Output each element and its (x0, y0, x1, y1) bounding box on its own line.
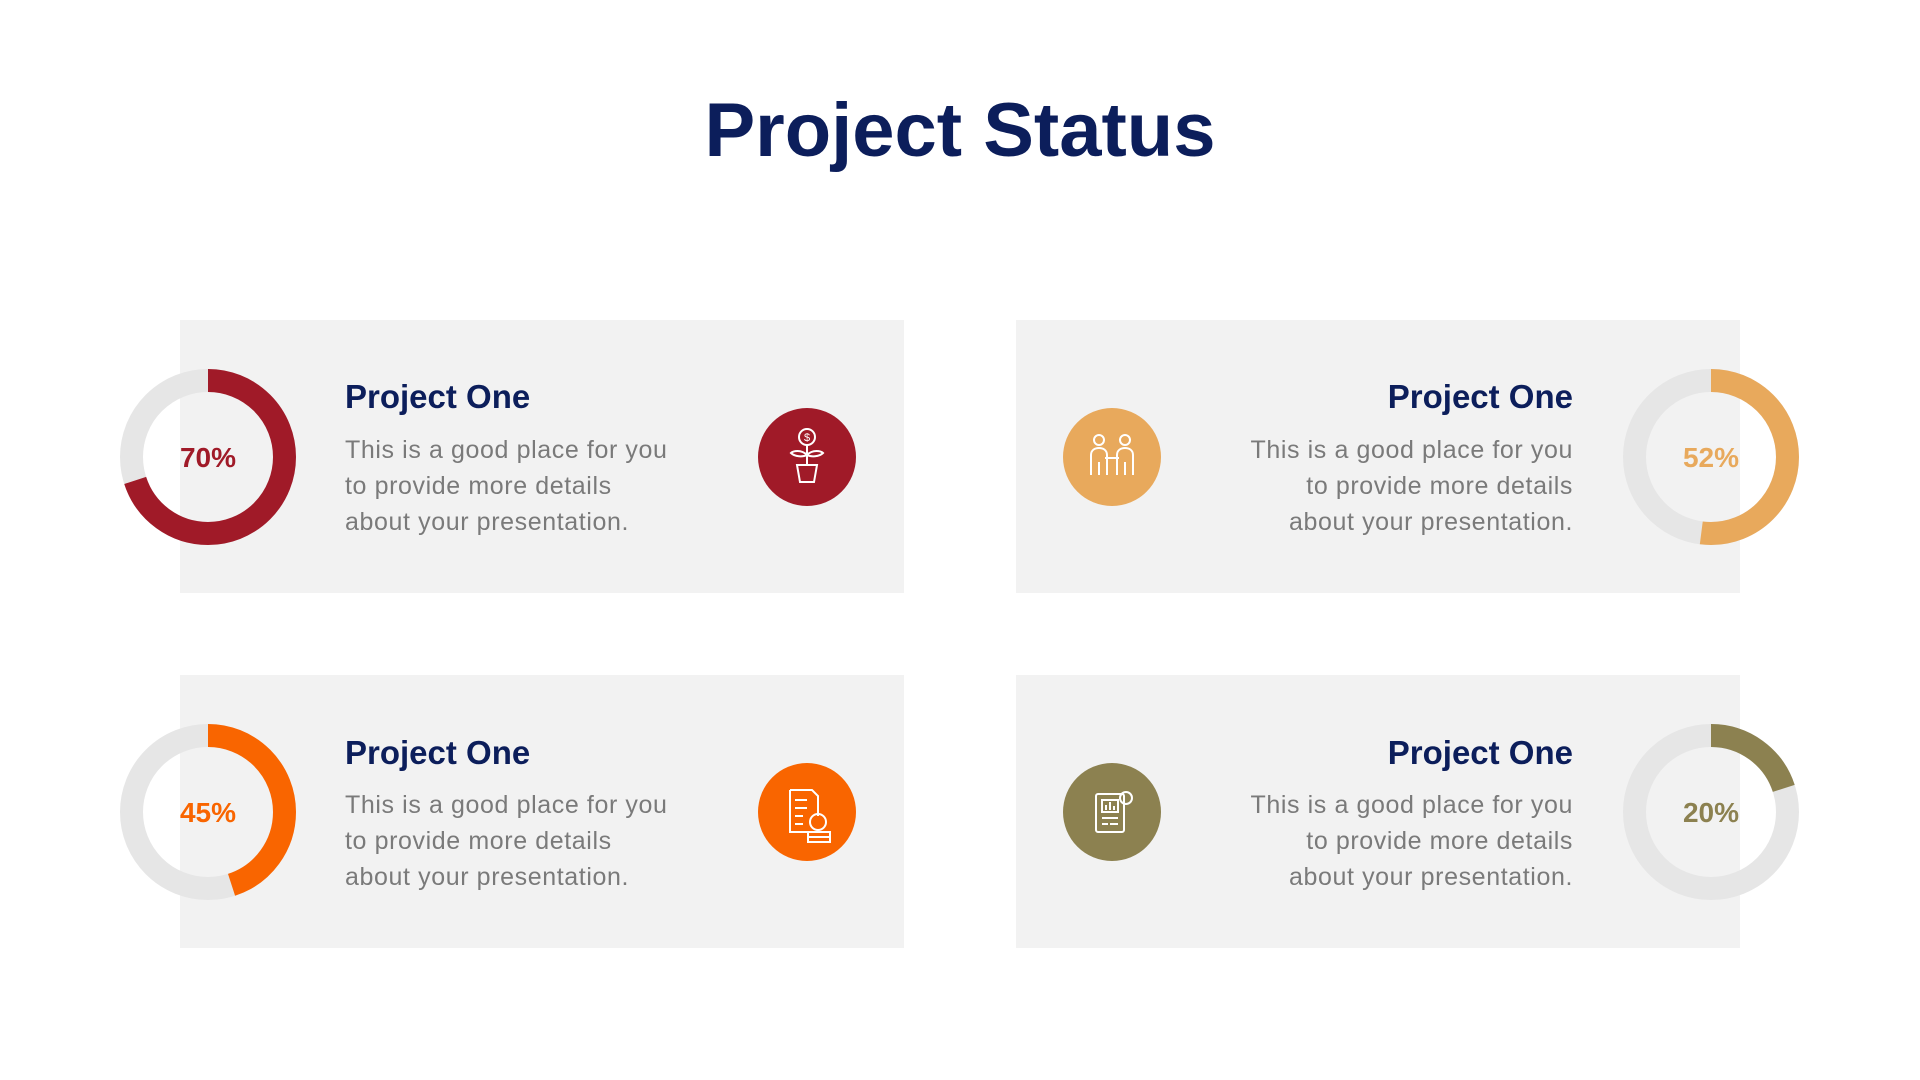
heading: top-right: Project One (1388, 378, 1573, 415)
donut: 70% (132, 380, 284, 534)
panel: top-left (180, 320, 904, 593)
panel: bottom-left (180, 675, 904, 948)
heading: bottom-right: Project One (1388, 734, 1573, 771)
text: bottom-right: to provide more details (1306, 827, 1573, 855)
text: bottom-left: This is a good place for you (345, 791, 668, 819)
panel: top-right (1016, 320, 1740, 593)
text: top-left: to provide more details (345, 472, 612, 500)
text: bottom-left: about your presentation. (345, 863, 629, 891)
donut: 45%: 45% (180, 797, 236, 828)
heading: top-left: Project One (345, 378, 530, 415)
panel: bottom-right (1016, 675, 1740, 948)
text: top-left: about your presentation. (345, 508, 629, 536)
donut: 20%: 20% (1683, 797, 1739, 828)
text: bottom-right: This is a good place for you (1250, 791, 1573, 819)
text: top-left: This is a good place for you (345, 436, 668, 464)
text: bottom-right (1250, 791, 1573, 891)
title: Project Status (704, 88, 1216, 173)
donut: 20% (1634, 736, 1788, 888)
donut: 52%: 52% (1683, 442, 1739, 473)
text: bottom-right: about your presentation. (1289, 863, 1573, 891)
text: top-left (345, 436, 668, 536)
text: bottom-left: to provide more details (345, 827, 612, 855)
text: bottom-left (345, 791, 668, 891)
donut: 52% (1634, 380, 1788, 534)
icon: plant with dollar: $ (804, 432, 810, 444)
heading: bottom-left: Project One (345, 734, 530, 771)
icon: invoice with coins (758, 763, 856, 861)
text: top-right: This is a good place for you (1250, 436, 1573, 464)
donut: 45% (132, 736, 284, 888)
text: top-right: to provide more details (1306, 472, 1573, 500)
icon: people (1063, 408, 1161, 506)
icon: report document (1063, 763, 1161, 861)
donut: 70%: 70% (180, 442, 236, 473)
text: top-right (1250, 436, 1573, 536)
icon: plant with dollar (758, 408, 856, 506)
text: top-right: about your presentation. (1289, 508, 1573, 536)
